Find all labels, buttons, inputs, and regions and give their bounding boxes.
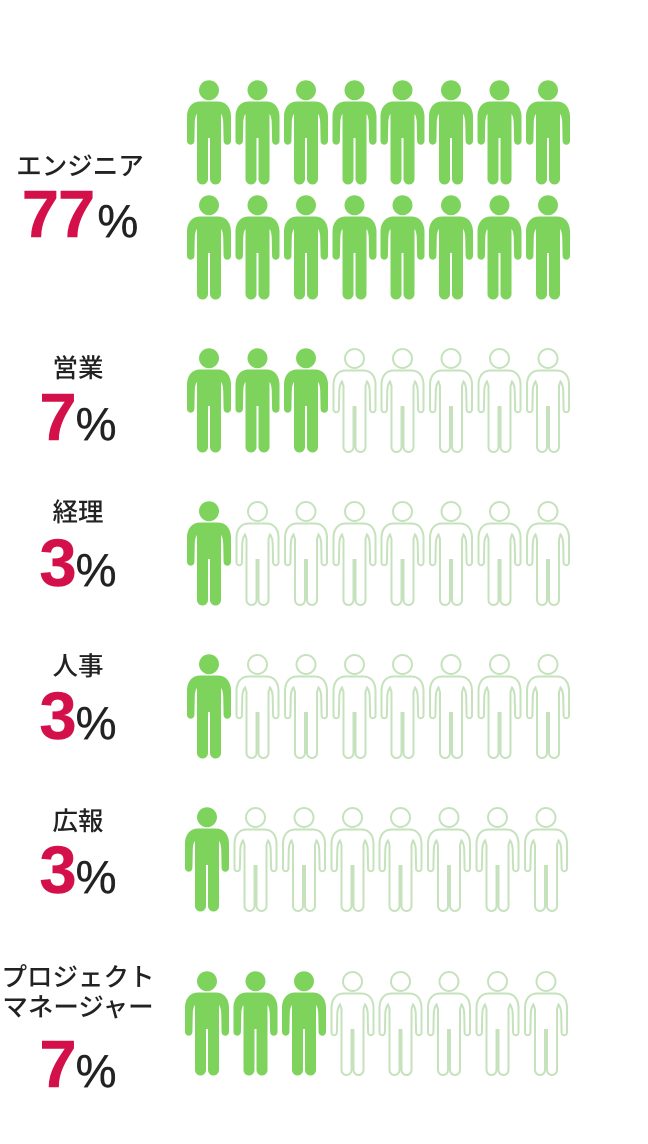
label: project manager 7%: マネージャー <box>2 987 154 1024</box>
label: human resources 3% <box>39 646 117 754</box>
label: project manager 7%: 7% <box>39 1027 117 1102</box>
label: human resources 3%: 3% <box>39 679 117 754</box>
row: accounting <box>187 501 569 606</box>
row: engineer, upper <box>187 80 570 184</box>
label: public relations 3%: 3% <box>39 833 117 908</box>
label: engineer 77%: 77% <box>22 177 138 252</box>
row: public relations <box>185 807 567 912</box>
label: sales 7%: 営業 <box>52 348 104 385</box>
row: sales <box>187 348 569 452</box>
row: project manager <box>185 971 567 1076</box>
label: sales 7%: 7% <box>39 380 117 455</box>
label: engineer 77% <box>16 146 144 252</box>
label: public relations 3%: 広報 <box>52 801 104 838</box>
label: engineer 77%: エンジニア <box>16 146 144 183</box>
label: accounting 3%: 経理 <box>52 492 104 529</box>
label: human resources 3%: 人事 <box>52 646 104 683</box>
label: project manager 7% <box>1 957 154 1102</box>
label: accounting 3%: 3% <box>39 526 117 601</box>
label: accounting 3% <box>39 492 117 601</box>
label: project manager 7%: プロジェクト <box>1 957 154 994</box>
row: human resources <box>187 654 569 758</box>
row: engineer, lower <box>187 195 570 300</box>
